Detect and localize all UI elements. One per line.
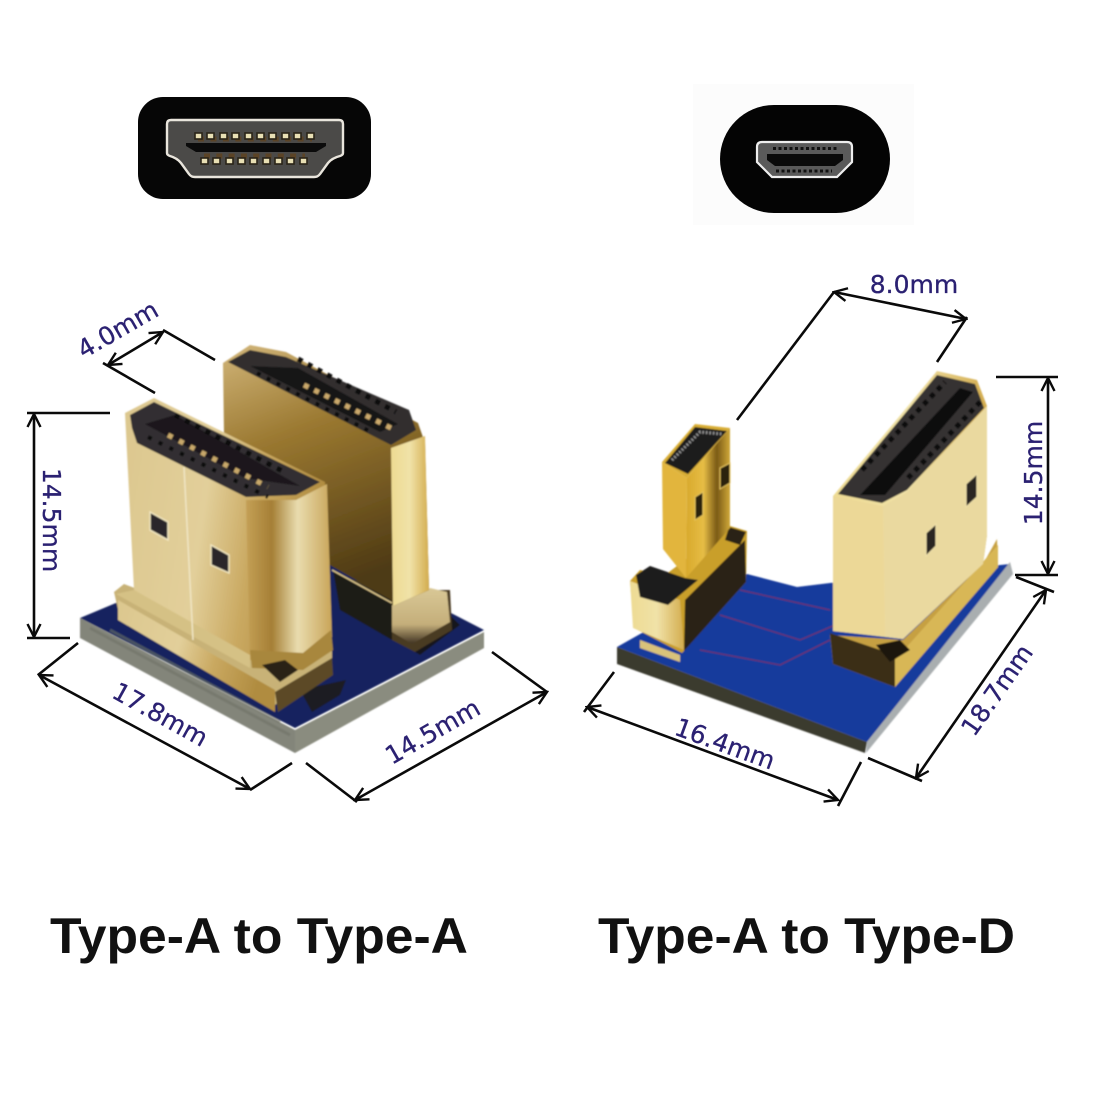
dimension: 14.5mm height left: 14.5mm [37, 468, 66, 572]
icon: HDMI Type-D port [693, 84, 914, 225]
dimension: 14.5mm depth left: 14.5mm [380, 693, 485, 770]
icon: HDMI Type-A port [138, 97, 371, 199]
product: Type-A to Type-D adapter [617, 371, 1013, 753]
title: Type-A to Type-A: Type-A to Type-A [50, 908, 468, 964]
dimension: 4.0mm gap: 4.0mm [72, 295, 163, 364]
dimension: 8.0mm [737, 270, 967, 420]
dimension: 17.8mm [38, 643, 292, 790]
dimension: 14.5mm depth left [306, 652, 547, 802]
PCB board [80, 530, 484, 753]
dimension: 18.7mm [868, 577, 1054, 781]
dimension: 16.4mm: 16.4mm [671, 713, 779, 775]
rear connector [223, 345, 452, 652]
dimension: 14.5mm height right: 14.5mm [1019, 421, 1048, 525]
Type-D connector [630, 424, 747, 662]
front connector [114, 398, 333, 712]
title: Type-A to Type-D: Type-A to Type-D [598, 908, 1015, 964]
dimension: 4.0mm gap [72, 295, 215, 393]
dimension: 17.8mm: 17.8mm [107, 677, 213, 753]
Type-A connector [830, 371, 998, 687]
dimension: 16.4mm [584, 672, 861, 806]
product: Type-A to Type-A adapter [80, 345, 484, 753]
dimension: 8.0mm: 8.0mm [870, 270, 958, 299]
dimension: 18.7mm: 18.7mm [955, 639, 1039, 741]
PCB board [617, 562, 1013, 753]
